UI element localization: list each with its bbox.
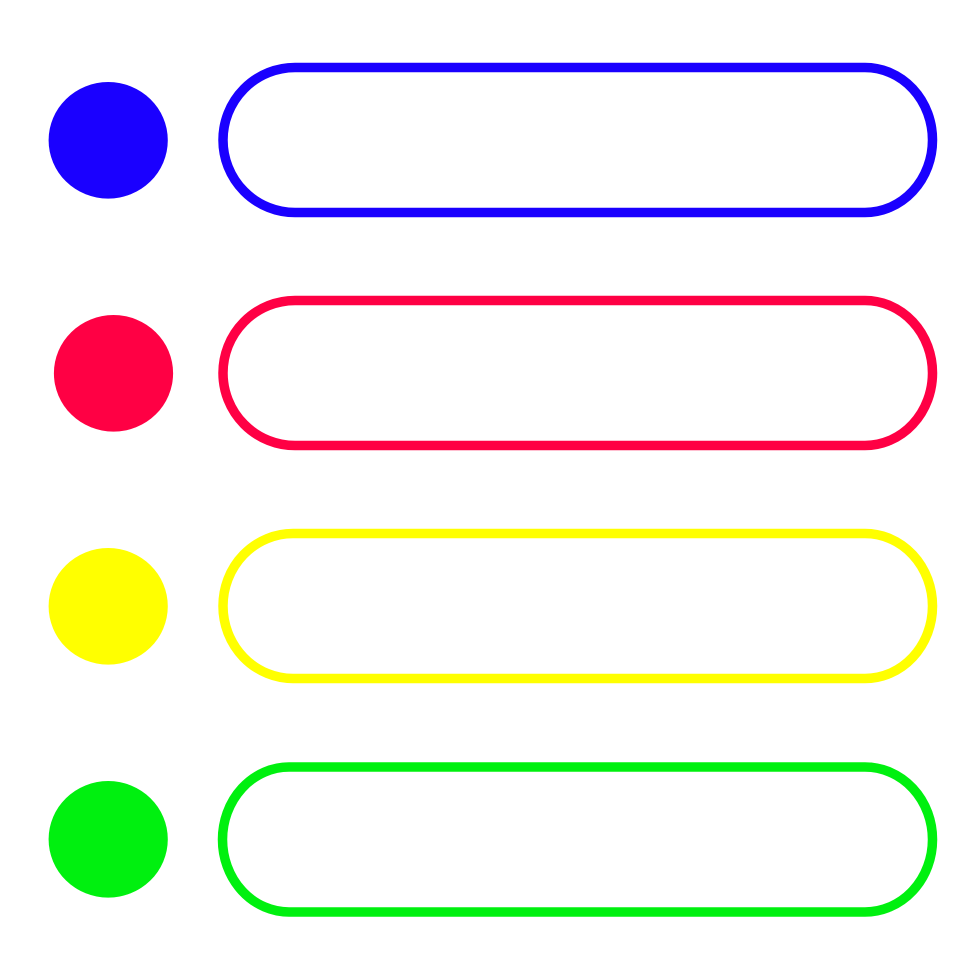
row 2: red <box>54 300 932 446</box>
icon: yellow circle <box>49 548 168 665</box>
panel: yellow outlined pill <box>223 534 932 678</box>
panel: blue outlined pill <box>223 68 932 212</box>
panel: red outlined pill <box>223 300 932 446</box>
row 4: green <box>49 767 933 912</box>
row 3: yellow <box>49 534 933 678</box>
icon: blue circle <box>49 82 168 199</box>
panel: green outlined pill <box>222 767 932 912</box>
icon: red circle <box>54 315 173 432</box>
row 1: blue <box>49 68 933 212</box>
icon: green circle <box>49 781 168 898</box>
